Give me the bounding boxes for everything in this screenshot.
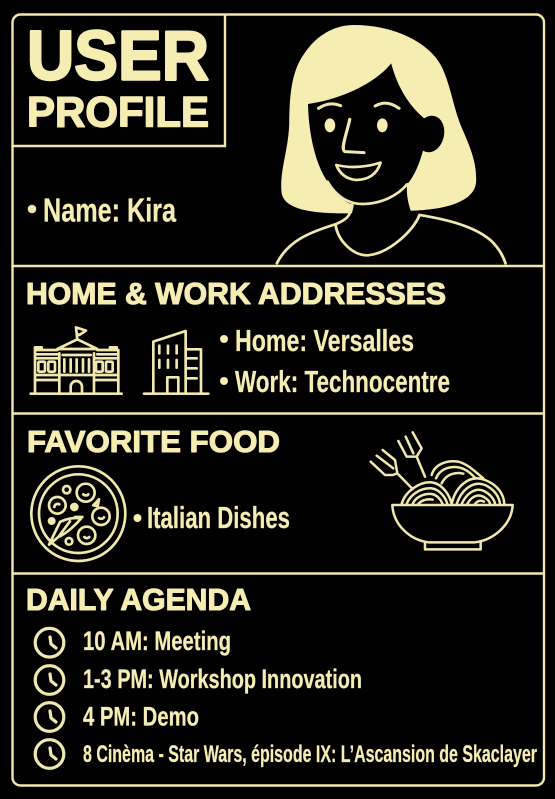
icon: clock 1 bbox=[35, 628, 64, 657]
item: work: Work: Technocentre bbox=[235, 364, 450, 399]
portrait of Kira bbox=[277, 25, 506, 263]
icon: clock 2 bbox=[35, 666, 64, 694]
panel: daily agenda bbox=[26, 582, 537, 768]
icon: pizza bbox=[31, 466, 125, 561]
name item: Name: Kira bbox=[43, 192, 176, 228]
heading: daily agenda: DAILY AGENDA bbox=[26, 582, 251, 617]
agenda item 3: 4 PM: Demo bbox=[83, 702, 199, 732]
title box bbox=[12, 14, 225, 146]
item: Italian dishes bbox=[134, 500, 290, 535]
icon: pasta bowl bbox=[371, 432, 513, 549]
icon: palace bbox=[31, 327, 122, 394]
heading: addresses: HOME & WORK ADDRESSES bbox=[26, 276, 446, 311]
icon: clock 3 bbox=[35, 703, 64, 731]
item: Italian dishes: Italian Dishes bbox=[147, 500, 290, 535]
panel: profile header bbox=[12, 14, 506, 263]
agenda item 1: 10 AM: Meeting bbox=[83, 626, 231, 656]
agenda item 2: 1-3 PM: Workshop Innovation bbox=[83, 664, 362, 694]
title: USER: USER bbox=[27, 16, 209, 94]
panel: home and work addresses bbox=[26, 276, 450, 399]
icon: office building bbox=[144, 331, 208, 394]
panel: favorite food bbox=[27, 424, 513, 561]
icon: clock 4 bbox=[35, 740, 64, 768]
title: PROFILE: PROFILE bbox=[27, 90, 209, 136]
item: home: Home: Versalles bbox=[235, 323, 414, 358]
item: work bbox=[220, 364, 450, 399]
heading: favorite food: FAVORITE FOOD bbox=[27, 424, 280, 459]
